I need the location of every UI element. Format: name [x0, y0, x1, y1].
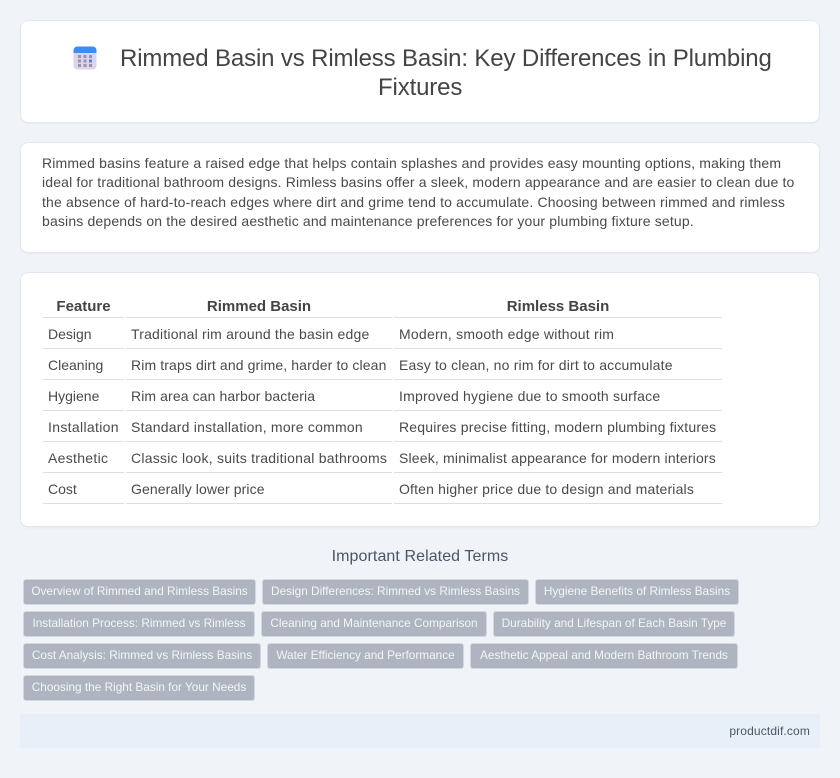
icon: calendar grid — [74, 46, 96, 70]
row: design: Design — [48, 326, 92, 342]
title — [120, 45, 772, 101]
panel: introduction — [20, 142, 820, 253]
title: Fixtures — [378, 74, 462, 101]
tags: related terms: Cost Analysis: Rimmed vs Rimless Basins — [32, 648, 252, 662]
row: cleaning: Rim traps dirt and grime, harder to clean — [131, 357, 386, 373]
row: hygiene — [48, 388, 660, 404]
text block: introduction: ideal for traditional bathroom designs. Rimless basins offer a sleek, modern appearance and are easier to clean due to — [42, 174, 794, 190]
row: cleaning: Cleaning — [48, 357, 103, 373]
panel: comparison table — [20, 272, 820, 527]
row: installation: Standard installation, more common — [131, 419, 363, 435]
tags: related terms: Hygiene Benefits of Rimless Basins — [544, 584, 730, 598]
row: cost: Cost — [48, 481, 77, 497]
row: hygiene: Improved hygiene due to smooth surface — [399, 388, 660, 404]
tags: related terms: Choosing the Right Basin for Your Needs — [32, 680, 246, 694]
tags: related terms: Cleaning and Maintenance Comparison — [270, 616, 478, 630]
row: cost: Often higher price due to design and materials — [399, 481, 694, 497]
row: hygiene: Rim area can harbor bacteria — [131, 388, 315, 404]
row: installation: Installation — [48, 419, 119, 435]
row: aesthetic: Classic look, suits traditional bathrooms — [131, 450, 387, 466]
tags: related terms: Water Efficiency and Performance — [276, 648, 455, 662]
row: design: Traditional rim around the basin edge — [131, 326, 369, 342]
text block: introduction: Rimmed basins feature a raised edge that helps contain splashes and provides easy mounting options, making them — [42, 155, 781, 171]
row: cost: Generally lower price — [131, 481, 265, 497]
text block: introduction: basins depends on the desired aesthetic and maintenance preferences for your plumbing fixture setup. — [42, 213, 694, 229]
heading: important related terms: Important Related Terms — [332, 548, 508, 565]
text block: introduction: the absence of hard-to-reach edges where dirt and grime tend to accumulate. Choosing between rimmed and rimless — [42, 194, 785, 210]
footer: source: productdif.com — [729, 724, 810, 738]
tags: related terms: Overview of Rimmed and Rimless Basins — [31, 584, 248, 598]
tags: related terms: Aesthetic Appeal and Modern Bathroom Trends — [480, 648, 728, 662]
row: cleaning: Easy to clean, no rim for dirt to accumulate — [399, 357, 673, 373]
row: design: Modern, smooth edge without rim — [399, 326, 614, 342]
text block: introduction — [42, 155, 794, 229]
row: aesthetic — [48, 450, 716, 466]
row: installation: Requires precise fitting, modern plumbing fixtures — [399, 419, 716, 435]
panel: header — [20, 20, 820, 123]
table header: feature: Feature — [56, 298, 111, 315]
row: design — [48, 326, 614, 342]
tags: related terms: Design Differences: Rimmed vs Rimless Basins — [271, 584, 520, 598]
row: cost — [48, 481, 694, 497]
row: cleaning — [48, 357, 673, 373]
title: Rimmed Basin vs Rimless Basin: Key Differences in Plumbing — [120, 45, 772, 72]
table header: rimmed basin: Rimmed Basin — [207, 298, 311, 315]
row: hygiene: Hygiene — [48, 388, 99, 404]
row: aesthetic: Aesthetic — [48, 450, 108, 466]
tags: related terms — [23, 579, 739, 701]
tags: related terms: Installation Process: Rimmed vs Rimless — [32, 616, 246, 630]
footer bar — [20, 714, 820, 748]
row: installation — [48, 419, 716, 435]
tags: related terms: Durability and Lifespan of Each Basin Type — [502, 616, 726, 630]
row: aesthetic: Sleek, minimalist appearance for modern interiors — [399, 450, 716, 466]
table header: rimless basin: Rimless Basin — [507, 298, 609, 315]
